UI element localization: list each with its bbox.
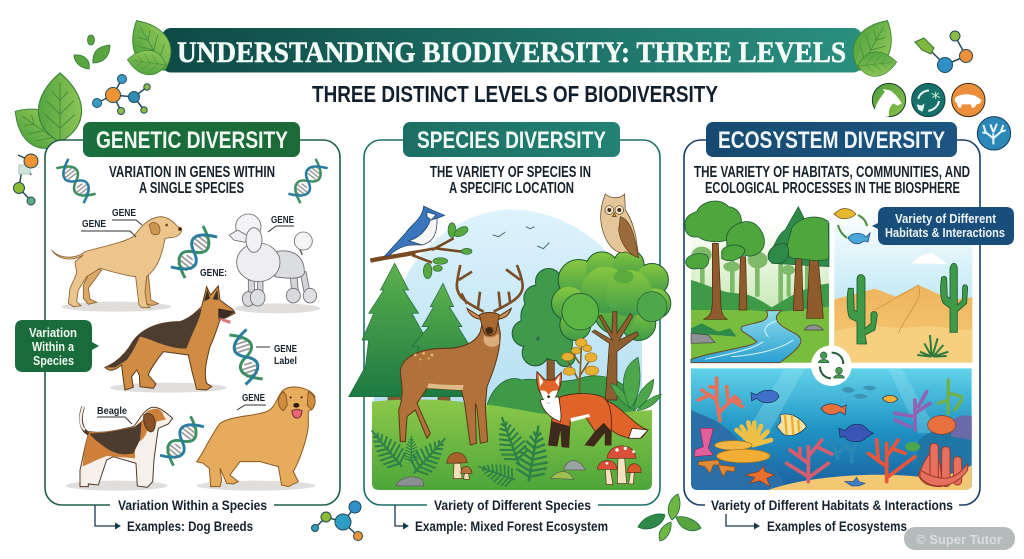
decoration: small leaves top left [74,35,110,69]
conifer right [412,283,472,408]
panel heading: SPECIES DIVERSITY [417,127,606,154]
hedge [485,376,635,417]
shrub: yellow flowers [562,338,599,393]
icon: coral badge [977,117,1011,150]
footer caption: Variety of Different Species [434,497,591,513]
callout: habitats and interactions: Habitats & Interactions [885,226,1005,240]
footer caption: Variety of Different Habitats & Interactions [711,497,953,513]
callout: variation within a species [15,320,99,372]
icon: badges [872,83,1011,150]
panel heading [403,122,620,157]
icon: boar badge [952,83,985,117]
icon: dna centre [229,329,263,385]
callout: habitats and interactions [872,207,1014,245]
illustration: forest scene [349,194,670,490]
footer gap [110,498,274,512]
decoration: large leaves left [5,73,82,159]
mushrooms [447,446,641,485]
panel description [109,164,275,197]
callout: variation within a species: Variation [29,326,77,340]
panel: genetic diversity [15,122,340,534]
icon: dna centre upper [171,226,217,278]
panel description [694,164,970,197]
arrow to example [95,505,121,530]
owl [601,194,639,258]
illustration: ecosystems [685,201,972,490]
sky dome [372,209,642,407]
bird: blue jay [385,206,445,256]
gene labels: GENE [112,207,136,219]
decoration: leaves bottom [638,494,701,541]
gene labels: GENE [82,218,106,230]
panel description: THE VARIETY OF SPECIES IN [430,164,591,181]
habitat: forest [685,201,829,363]
gene labels: GENE [274,343,297,355]
dog: poodle [229,214,320,313]
birds in sky [493,227,549,249]
watermark: © Super Tutor [916,533,1002,547]
watermark [904,527,1015,550]
footer caption: Variation Within a Species [118,497,267,513]
subtitle: THREE DISTINCT LEVELS OF BIODIVERSITY [312,81,718,107]
tree: right broadleaf [552,250,670,400]
panel border [364,140,660,505]
panel: species diversity [349,122,670,534]
tree: left broadleaf [513,269,575,387]
panel description: A SINGLE SPECIES [139,180,244,197]
panel border [45,140,340,505]
decoration: molecule bottom [312,501,362,540]
upper dogs [52,214,320,313]
ferns [362,413,554,490]
dog: labrador [52,217,182,312]
footer gap [705,498,959,512]
habitat: ocean [691,368,972,490]
fish [751,385,898,442]
decoration: title leaves left [121,12,180,79]
callout: habitats and interactions: Variety of Different [895,212,997,226]
callout: variation within a species: Within a [32,340,75,354]
gene labels: GENE [242,392,265,404]
icon: dna lower [160,416,204,466]
example text: Examples: Dog Breeds [127,518,253,534]
icon: goat badge [872,83,906,117]
panel description: A SPECIFIC LOCATION [449,180,574,197]
lower dogs [66,286,315,491]
arrow to example [395,505,409,530]
decoration: molecule left edge [14,154,38,205]
plant: big leaves [610,357,661,411]
fox [537,372,648,447]
bird branch [370,223,472,279]
example text: Examples of Ecosystems [767,518,907,534]
decoration: molecule top left [92,74,150,114]
arrow to example [726,514,760,530]
habitat: desert [834,207,972,363]
panel description: VARIATION IN GENES WITHIN [109,164,275,181]
callout: variation within a species: Species [33,354,74,368]
panel border [684,140,980,505]
panel heading: ECOSYSTEM DIVERSITY [718,127,945,154]
gene labels: Label [274,355,297,367]
gene labels [81,207,297,424]
footer gap [427,498,598,512]
decoration: molecule top right [915,31,972,72]
hub: interaction cycle [811,345,852,386]
title text: UNDERSTANDING BIODIVERSITY: THREE LEVELS [177,36,846,69]
panel heading [83,122,300,157]
panel heading [706,122,957,157]
panel heading: GENETIC DIVERSITY [96,127,288,154]
fish cycle [834,209,870,244]
icon: dna left [56,159,96,203]
panel description [430,164,591,197]
dog: german shepherd [105,286,235,393]
panel: ecosystem diversity [684,122,1014,534]
conifer left [349,263,427,408]
dog: golden retriever [197,387,315,491]
icon: species cycle badge [912,83,945,117]
icon: dna right [288,159,328,203]
deer [399,265,523,445]
gene labels: GENE [271,214,294,226]
corals [698,378,962,482]
decoration: title leaves right [844,12,903,79]
title banner [162,28,862,72]
dog: beagle [66,407,173,491]
ground [372,399,652,490]
anemone and sponges [698,423,771,477]
example text: Example: Mixed Forest Ecosystem [415,518,608,534]
gene labels: GENE: [200,267,227,279]
gene labels: Beagle [97,405,127,417]
rocks [396,461,585,486]
